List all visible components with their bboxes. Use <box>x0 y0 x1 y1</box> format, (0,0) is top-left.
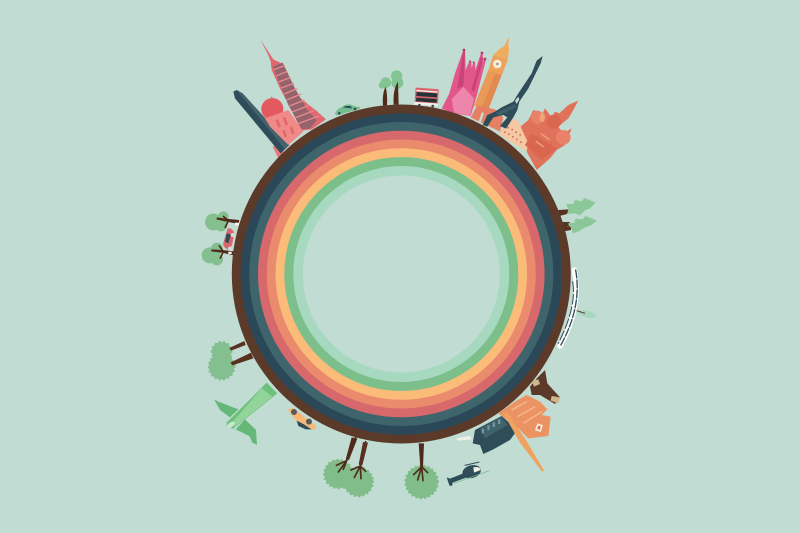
icon: orange temple <box>498 395 551 438</box>
ring: green <box>284 157 518 391</box>
planet centre <box>303 176 500 372</box>
icon: train <box>558 270 577 346</box>
ring: teal <box>249 122 553 426</box>
icon: green car <box>335 104 360 115</box>
icon: obelisk <box>233 90 289 158</box>
icon: red car <box>223 223 239 254</box>
icon: pine trees <box>558 198 597 233</box>
icon: dark castle <box>456 416 517 454</box>
planet: concentric rainbow rings <box>232 104 571 444</box>
icon: bottom single tree <box>406 443 438 498</box>
ring: brown crust <box>232 104 571 444</box>
icon: Eiffel tower <box>483 56 543 129</box>
ring: navy <box>241 113 562 435</box>
icon: upper side tree <box>205 211 239 231</box>
icon: onion domed palace <box>521 101 578 170</box>
landmarks: right side (pine trees, train, tree) <box>558 198 597 346</box>
icon: cream parliament block <box>498 118 532 152</box>
icon: cathedral with spires <box>442 49 486 116</box>
ring: pale green <box>293 166 509 382</box>
icon: lower side tree <box>202 243 234 265</box>
ring: red <box>258 131 545 417</box>
landmarks: top left (obelisk, capitol, skyscraper, car, trees) <box>233 40 403 158</box>
landmarks: top right (bus, cathedral, clock tower, gate, parliament, palace, Eiffel tower) <box>414 37 578 170</box>
icon: TV tower <box>503 412 544 472</box>
icon: yellow car <box>288 408 317 430</box>
icon: bottom double tree <box>324 437 373 496</box>
ring: salmon <box>267 140 536 408</box>
icon: double decker bus <box>414 88 439 108</box>
icon: Brandenburg gate <box>471 105 503 132</box>
landmarks: lower right (castle, temple, TV tower, helicopter) <box>447 370 560 486</box>
icon: clock tower <box>474 37 509 109</box>
icon: green airplane <box>214 383 277 445</box>
icon: side tree <box>209 341 253 379</box>
icon: two trees <box>379 70 403 106</box>
icon: skyscraper <box>261 40 326 131</box>
icon: capitol building <box>261 97 303 145</box>
icon: domed monument <box>530 370 560 404</box>
icon: side tree <box>577 309 596 319</box>
landmarks: left side (trees, red car) <box>202 211 239 265</box>
landmarks: lower left (trees, airplane, yellow car) <box>209 341 438 498</box>
ring: orange <box>276 148 527 400</box>
icon: helicopter <box>447 462 489 486</box>
